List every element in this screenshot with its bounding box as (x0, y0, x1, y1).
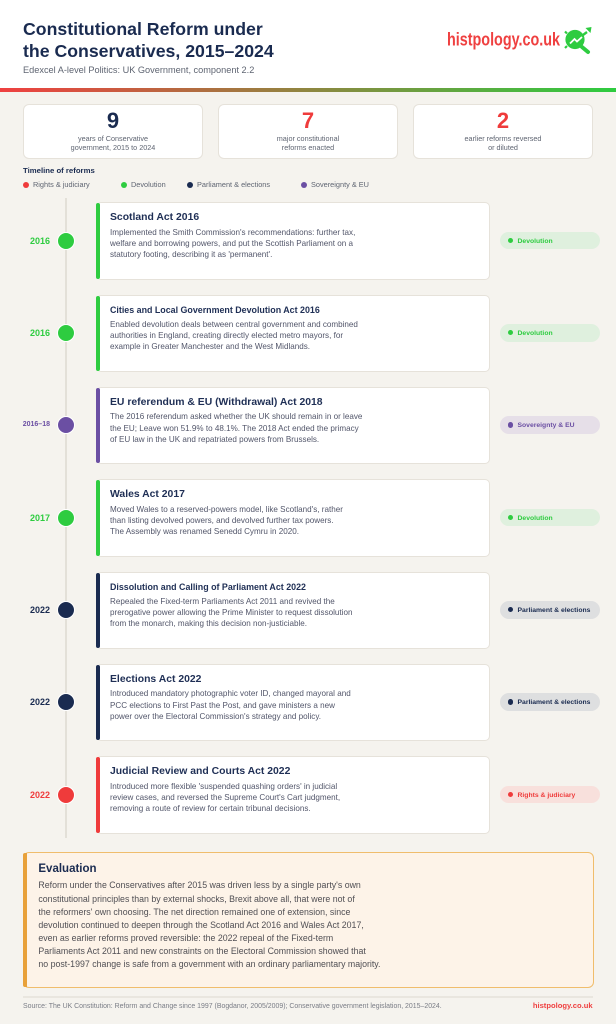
card: EU referendum & EU (Withdrawal) Act 2018 (110, 396, 323, 408)
logo: histpology.co.uk (447, 30, 561, 50)
card: Cities and Local Government Devolution Act 2016 (110, 305, 320, 315)
reform 2 (30, 295, 600, 372)
tag: Rights & judiciary (518, 792, 575, 799)
tag (500, 693, 600, 711)
card: The Assembly was renamed Senedd Cymru in 2020. (110, 527, 299, 536)
evaluation text: devolution continued to deepen through the Scotland Act 2016 and Wales Act 2017, (38, 920, 364, 930)
card: authorities in England, creating directly elected metro mayors, for (110, 331, 343, 340)
footer rule (23, 996, 593, 998)
tag (500, 324, 600, 342)
stat card: years (23, 104, 203, 159)
legend: Devolution (131, 180, 166, 189)
year: 2022 (30, 697, 50, 707)
evaluation text: the reformers' own choosing. The net direction remained one of extension, since (38, 907, 350, 917)
card: from the monarch, making this decision non-justiciable. (110, 619, 307, 628)
stat card: reversed: earlier reforms reversed (465, 134, 541, 143)
evaluation text: Parliaments Act 2011 and new constraints on the Electoral Commission showed that (38, 946, 366, 956)
card: Repealed the Fixed-term Parliaments Act 2011 and revived the (110, 597, 335, 606)
tag (500, 786, 600, 803)
card: Introduced more flexible 'suspended quashing orders' in judicial (110, 782, 337, 791)
card: review cases, and reversed the Supreme Court's Cart judgment, (110, 793, 340, 802)
year: 2016 (30, 328, 50, 338)
reform 6 (30, 664, 600, 741)
stat card: years: years of Conservative (78, 134, 148, 143)
year: 2022 (30, 605, 50, 615)
stat card: reforms: major constitutional (277, 134, 339, 143)
card (96, 572, 490, 649)
node (57, 416, 75, 434)
header gradient rule (0, 88, 616, 92)
source: Source: The UK Constitution: Reform and Change since 1997 (Bogdanor, 2005/2009); Conservative government legislation, 2015–2024. (23, 1003, 442, 1010)
card: of EU law in the UK and repatriated powers from Brussels. (110, 435, 319, 444)
card: example in Greater Manchester and the West Midlands. (110, 342, 310, 351)
card (96, 387, 490, 464)
card: Wales Act 2017 (110, 489, 185, 500)
card (96, 202, 490, 280)
tag (500, 601, 600, 619)
legend (23, 180, 369, 189)
stat card: years: 9 (107, 108, 119, 133)
tag: Parliament & elections (518, 699, 590, 706)
evaluation heading: Evaluation (38, 863, 97, 875)
card: Dissolution and Calling of Parliament Act 2022 (110, 582, 306, 592)
card (96, 479, 490, 557)
year: 2022 (30, 790, 50, 800)
stat card: reversed: 2 (497, 108, 509, 133)
title (23, 19, 274, 61)
node (57, 232, 75, 250)
node (57, 786, 75, 804)
card: Introduced mandatory photographic voter ID, changed mayoral and (110, 689, 351, 698)
year: 2017 (30, 513, 50, 523)
reform 5 (30, 572, 600, 649)
card (96, 295, 490, 372)
card: than listing devolved powers, and devolved further tax powers. (110, 516, 334, 525)
tag (500, 509, 600, 526)
card: The 2016 referendum asked whether the UK should remain in or leave (110, 412, 362, 421)
card: statutory footing, describing it as 'permanent'. (110, 250, 272, 259)
card: power over the Electoral Commission's strategy and policy. (110, 712, 321, 721)
header band (0, 0, 616, 92)
reform 4 (30, 479, 600, 557)
card: Elections Act 2022 (110, 674, 201, 684)
card: removing a route of review for certain tribunal decisions. (110, 804, 311, 813)
tag: Devolution (518, 238, 553, 245)
evaluation panel (23, 852, 594, 988)
card: Moved Wales to a reserved-powers model, like Scotland's, rather (110, 505, 343, 514)
node (57, 601, 75, 619)
card (96, 756, 490, 834)
year: 2016 (30, 236, 50, 246)
legend: Rights & judiciary (33, 180, 90, 189)
evaluation text (38, 880, 380, 969)
reform 3 (23, 387, 600, 464)
card (96, 664, 490, 741)
card: Enabled devolution deals between central government and combined (110, 320, 358, 329)
evaluation text: no post-1997 change is safe from a government with an ordinary parliamentary majority. (38, 959, 380, 969)
subtitle: Edexcel A-level Politics: UK Government, component 2.2 (23, 65, 254, 75)
card: the EU; Leave won 51.9% to 48.1%. The 2018 Act ended the primacy (110, 424, 359, 433)
evaluation text: even as earlier reforms proved reversible: the 2022 repeal of the Fixed-term (38, 933, 333, 943)
card: prerogative power allowing the Prime Minister to request dissolution (110, 608, 352, 617)
accent bar (23, 853, 27, 987)
tag (500, 416, 600, 434)
stat card: reforms: reforms enacted (282, 143, 334, 152)
title: Constitutional Reform under (23, 19, 263, 39)
reform 1 (30, 202, 600, 280)
card: Implemented the Smith Commission's recommendations: further tax, (110, 228, 355, 237)
tag: Devolution (518, 515, 553, 522)
card: PCC elections to First Past the Post, and gave ministers a new (110, 701, 335, 710)
reform 7 (30, 756, 600, 834)
year: 2016–18 (23, 421, 50, 428)
node (57, 693, 75, 711)
tag: Devolution (518, 330, 553, 337)
title: the Conservatives, 2015–2024 (23, 41, 274, 61)
stat card: reversed (413, 104, 593, 159)
tag: Parliament & elections (518, 607, 590, 614)
card: welfare and borrowing powers, and put the Scottish Parliament on a (110, 239, 353, 248)
node (57, 324, 75, 342)
legend: Parliament & elections (197, 180, 270, 189)
timeline spine (65, 198, 67, 838)
footer brand: histpology.co.uk (533, 1001, 593, 1010)
timeline heading: Timeline of reforms (23, 166, 95, 175)
stat card: reforms (218, 104, 398, 159)
stat card: reversed: or diluted (488, 143, 518, 152)
evaluation text: constitutional principles than by external shocks, Brexit above all, that were not of (38, 894, 355, 904)
card: Scotland Act 2016 (110, 212, 199, 223)
evaluation text: Reform under the Conservatives after 2015 was driven less by a single party's own (38, 880, 361, 890)
tag (500, 232, 600, 249)
tag: Sovereignty & EU (518, 422, 575, 429)
node (57, 509, 75, 527)
card: Judicial Review and Courts Act 2022 (110, 766, 290, 777)
legend: Sovereignty & EU (311, 180, 369, 189)
stat card: reforms: 7 (302, 108, 314, 133)
stat card: years: government, 2015 to 2024 (71, 143, 155, 152)
